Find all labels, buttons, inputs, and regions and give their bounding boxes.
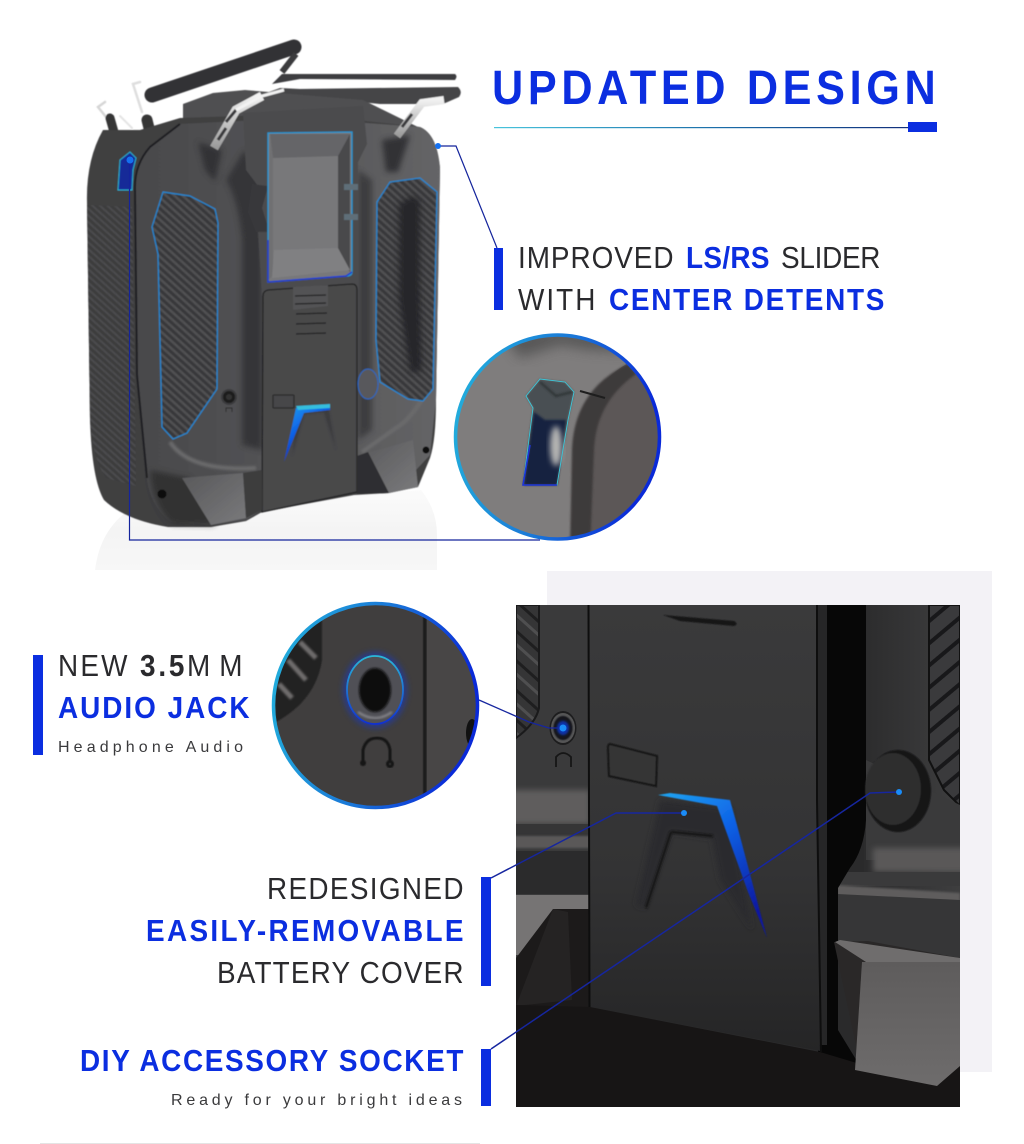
label: audio jack: AUDIO JACK	[58, 691, 250, 725]
left body area	[516, 605, 588, 1007]
audio jack	[550, 711, 576, 767]
dark channel beside cover	[817, 605, 866, 1066]
label: improved LS/RS slider: WITH	[518, 283, 595, 317]
jack highlight	[343, 652, 407, 728]
label: battery cover: BATTERY COVER	[217, 956, 464, 990]
label: DIY accessory socket: DIY ACCESSORY SOCKET	[80, 1044, 463, 1078]
floor reflection under transmitter	[95, 490, 437, 570]
toggle switches	[98, 82, 150, 132]
screw holes	[158, 446, 430, 498]
cover slot	[663, 615, 736, 626]
callout line: top right to LS/RS label	[435, 143, 497, 248]
title: UPDATED DESIGN	[492, 61, 936, 115]
right grip panel	[376, 178, 437, 401]
audio jack	[221, 389, 237, 412]
lower background panel	[547, 571, 992, 1072]
callout line: side slider to zoom circle	[130, 160, 540, 540]
audio jack zoom circle	[272, 600, 487, 810]
molded shading	[170, 135, 425, 468]
callout: audio jack line	[479, 700, 566, 732]
accessory socket cover	[865, 750, 931, 832]
side clips	[248, 184, 267, 232]
floor	[516, 1005, 960, 1107]
cover handle	[636, 793, 767, 938]
label: audio jack	[33, 649, 250, 756]
antenna	[152, 47, 296, 95]
label: improved LS/RS slider	[494, 241, 884, 317]
transmitter product photo	[87, 47, 461, 527]
left foot	[182, 470, 262, 525]
side slider highlight	[118, 152, 136, 190]
side grip texture	[87, 205, 136, 486]
label: DIY accessory socket: Ready for your bright ideas	[171, 1092, 462, 1109]
label: battery cover: EASILY-REMOVABLE	[146, 914, 464, 948]
label: improved LS/RS slider: SLIDER	[781, 241, 880, 275]
label: audio jack: MM	[187, 649, 243, 683]
right foot	[834, 940, 960, 1086]
label: battery cover: REDESIGNED	[267, 872, 463, 906]
front shell	[135, 118, 440, 525]
right foot	[357, 440, 418, 494]
bottom shadow	[150, 470, 215, 525]
front seam	[135, 124, 180, 478]
centre column	[243, 106, 367, 296]
headphone icon	[362, 738, 392, 766]
title underline	[494, 122, 937, 132]
callout: battery cover line	[491, 810, 687, 878]
callout dot: side slider	[126, 156, 134, 164]
slider highlight	[523, 379, 574, 485]
top shell	[183, 90, 420, 128]
bottom divider	[40, 1143, 480, 1144]
right body area	[837, 605, 968, 960]
label: improved LS/RS slider: IMPROVED	[518, 241, 674, 275]
accessory socket	[358, 369, 378, 399]
battery cover	[262, 284, 357, 512]
battery cover	[589, 605, 820, 1051]
close-up photo	[510, 605, 968, 1107]
carry handle	[240, 74, 461, 110]
callout: accessory socket line	[491, 789, 902, 1049]
label: battery cover	[146, 872, 491, 990]
cover notch	[608, 744, 657, 786]
slider zoom circle	[454, 333, 662, 541]
screen recess	[268, 132, 358, 282]
body shell	[87, 114, 440, 527]
label: audio jack: NEW	[58, 649, 128, 683]
label: DIY accessory socket	[80, 1044, 491, 1109]
left grip panel	[152, 192, 218, 439]
label: improved LS/RS slider: CENTER DETENTS	[609, 283, 884, 317]
chrome arms	[214, 90, 444, 148]
label: audio jack: 3.5	[140, 649, 184, 683]
label: improved LS/RS slider: LS/RS	[686, 241, 770, 275]
label: audio jack: Headphone Audio	[58, 739, 243, 756]
